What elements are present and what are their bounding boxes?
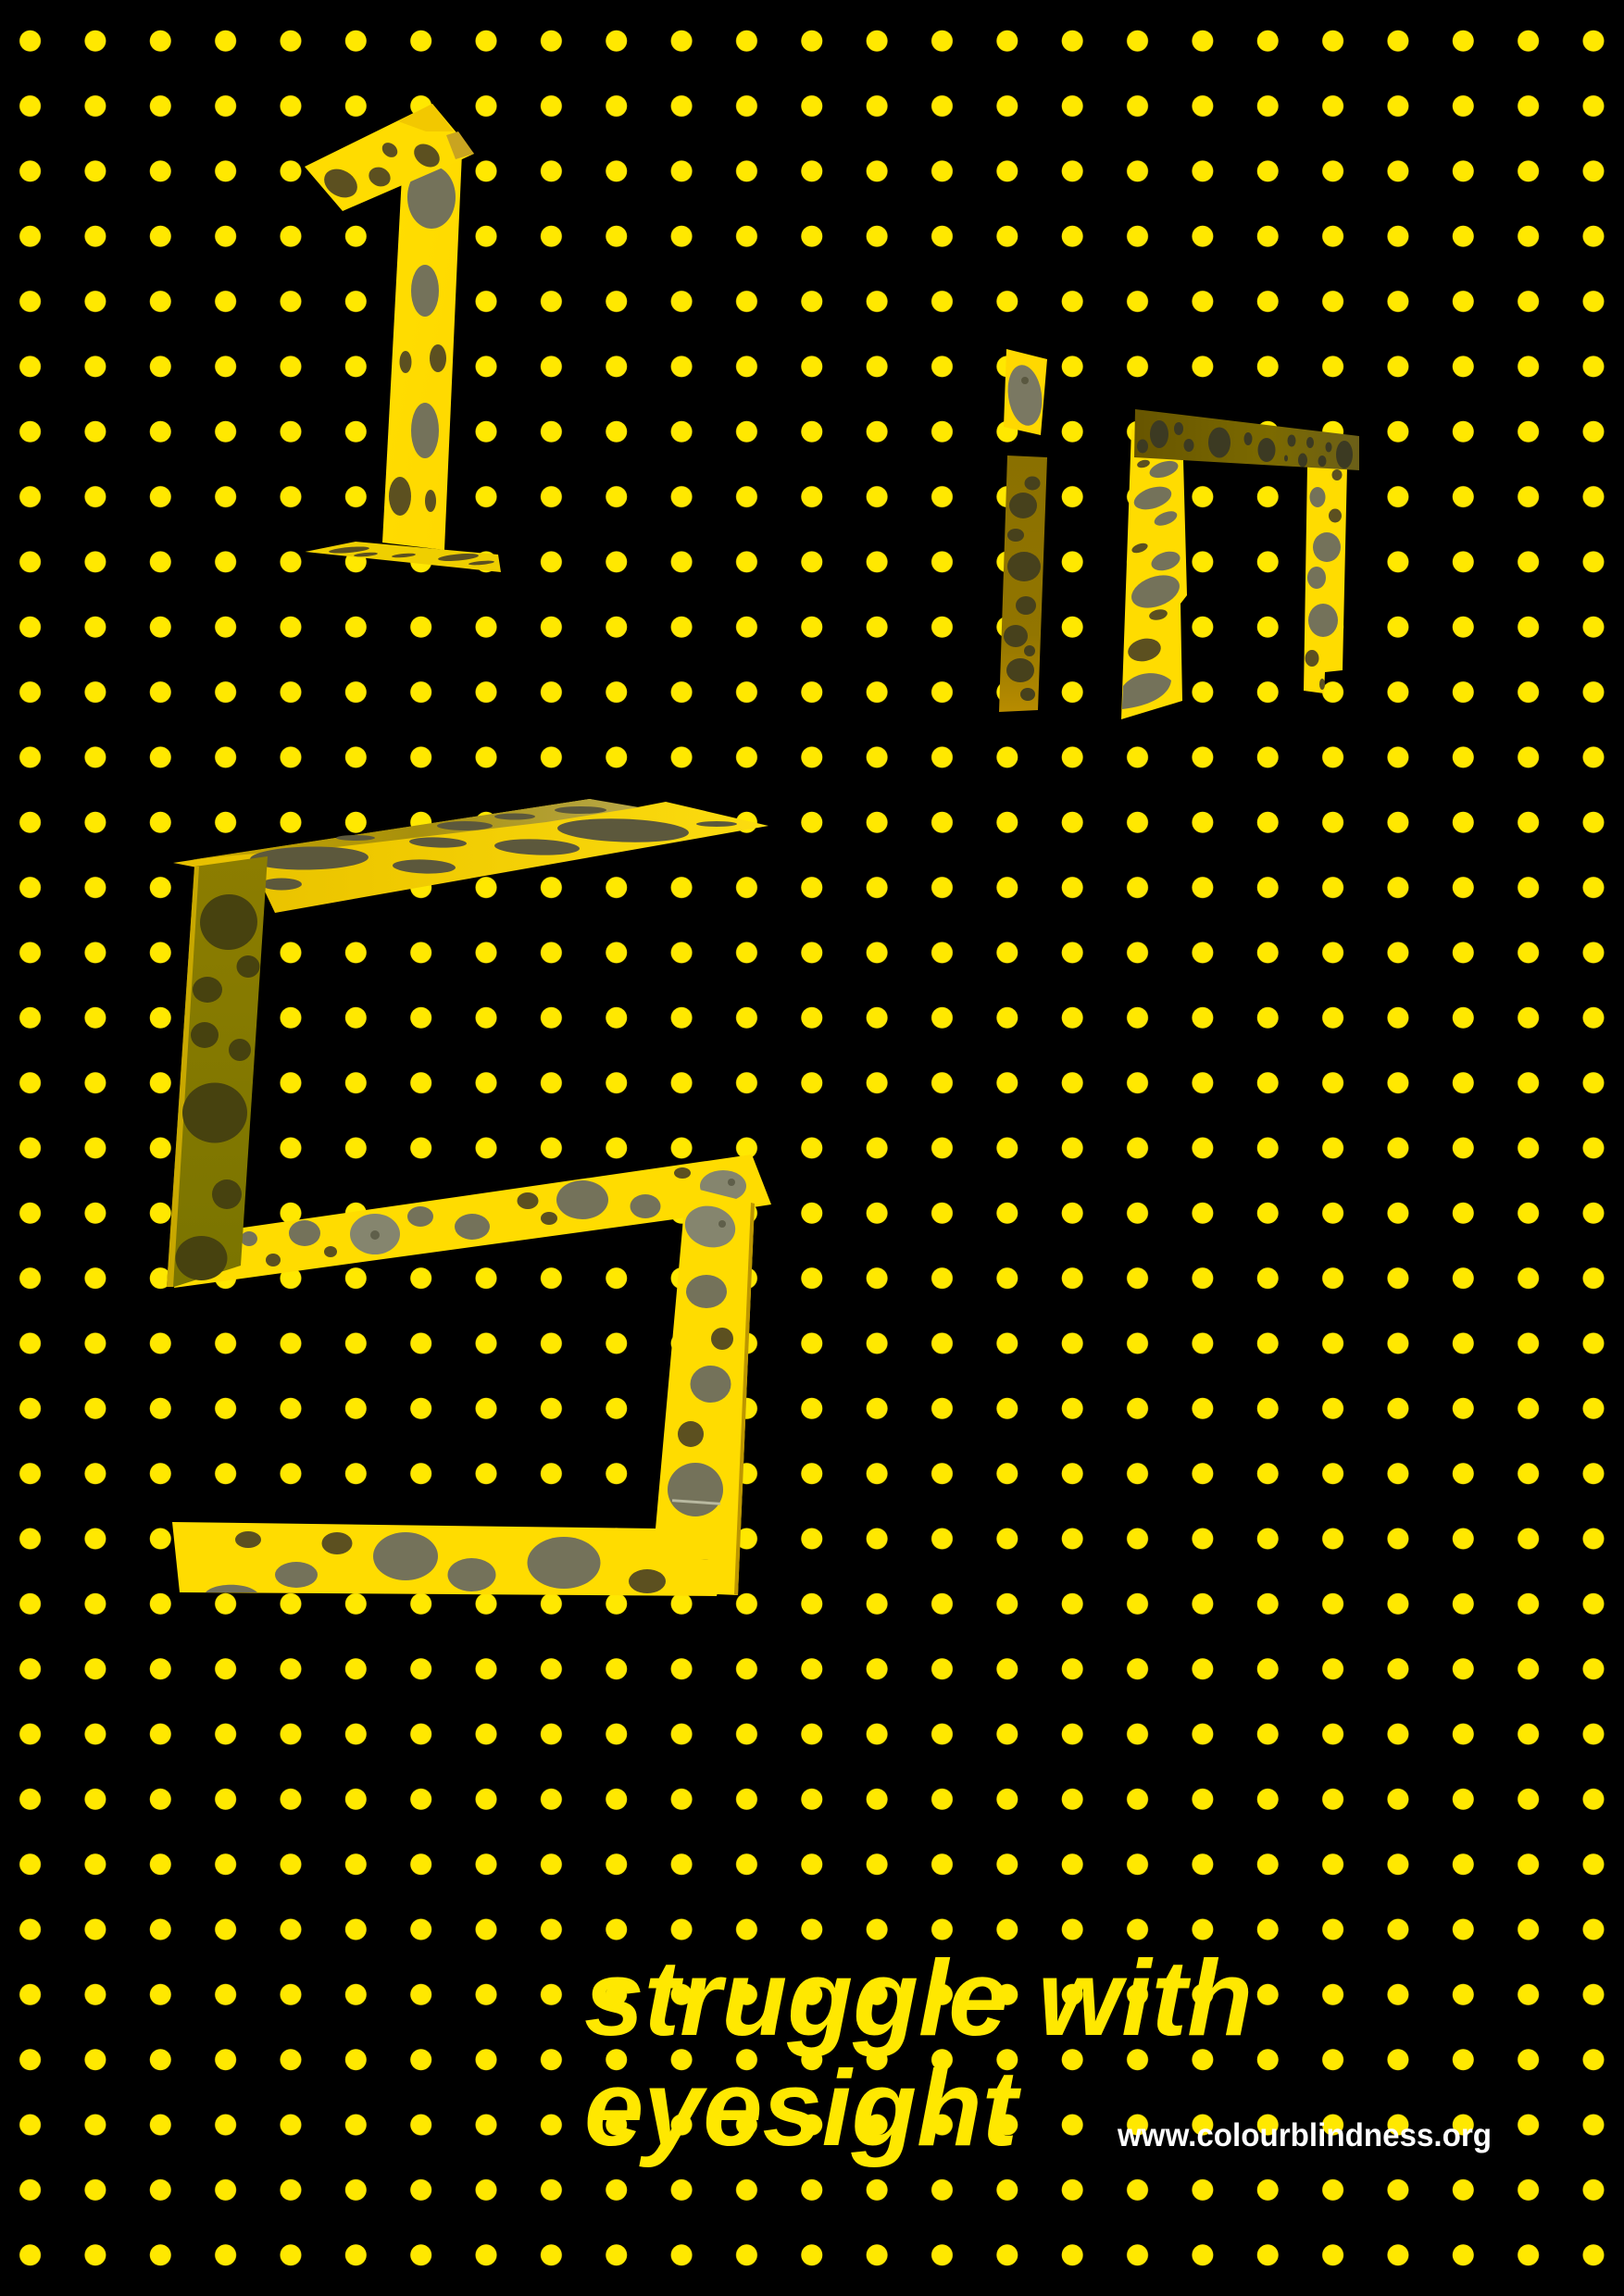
word in xyxy=(999,349,1359,719)
numeral 5 left vertical bar xyxy=(167,856,268,1287)
numeral 1 flag xyxy=(305,104,474,211)
caption: struggle with eyesight: struggle with xyxy=(584,1938,1253,2058)
numeral 5 xyxy=(167,799,771,1596)
letter i dot xyxy=(1004,349,1047,435)
numeral 5 top bar xyxy=(173,799,768,913)
letter i stem xyxy=(999,455,1047,712)
numeral 5 middle bar xyxy=(174,1154,771,1288)
caption second line: eyesight xyxy=(584,2048,1021,2168)
numeral 1 foot xyxy=(306,542,501,572)
numeral 1 xyxy=(305,104,501,572)
letter n left leg xyxy=(1121,429,1187,719)
website url: www.colourblindness.org xyxy=(1117,2117,1492,2153)
letter n right leg xyxy=(1304,466,1347,693)
numeral 1 stem xyxy=(382,153,462,550)
numeral 5 bottom bar xyxy=(172,1522,726,1596)
letter n top bar xyxy=(1134,409,1359,470)
numeral 5 right vertical bar xyxy=(652,1186,755,1595)
